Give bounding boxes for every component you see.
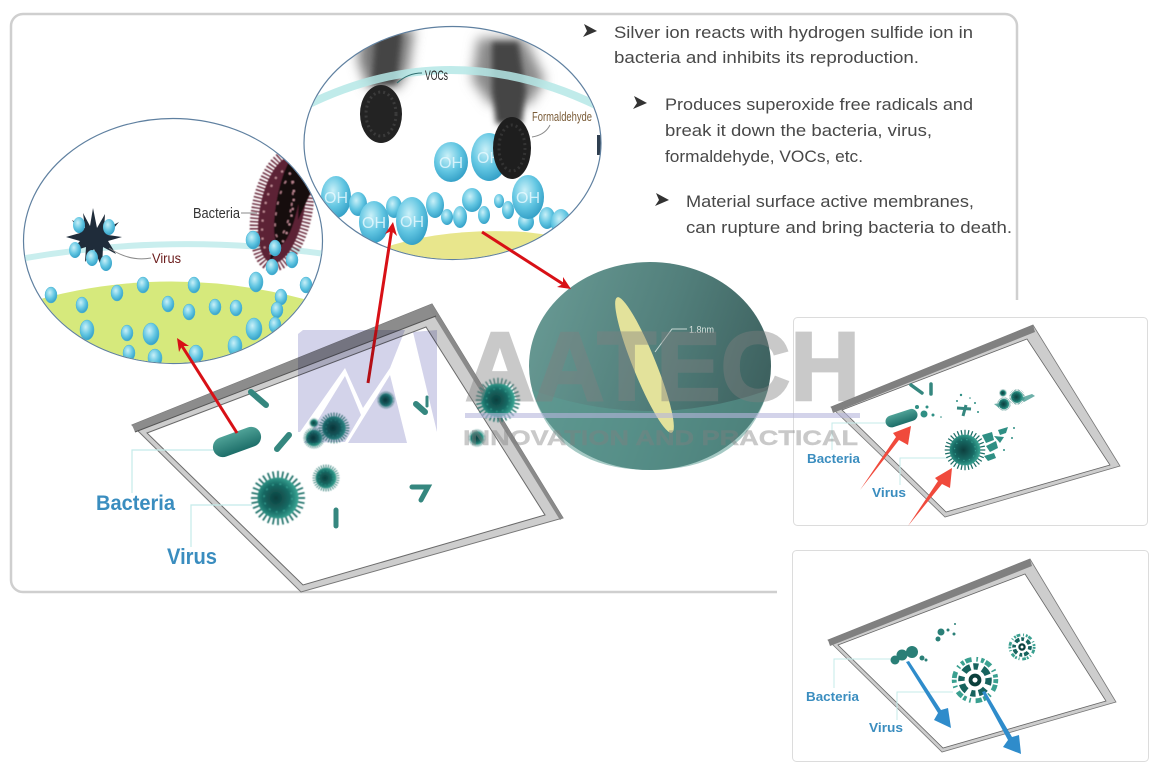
leader lines xyxy=(397,73,422,83)
bacteria breaking up xyxy=(884,384,979,429)
label: VOCs: VOCs xyxy=(425,67,448,83)
main rounded panel outline xyxy=(11,14,1017,592)
watermark: AATECH logo xyxy=(298,312,860,450)
label: Virus: Virus xyxy=(152,250,181,266)
bacterium, dark red xyxy=(248,154,314,272)
label: Virus: Virus xyxy=(872,485,906,500)
callout lines xyxy=(132,450,252,547)
label: Bacteria (large): Bacteria xyxy=(96,492,175,515)
virus debris xyxy=(954,635,1034,701)
watermark name: AATECH xyxy=(465,312,860,421)
circle: virus and bacteria on surface xyxy=(20,118,325,370)
label: Bacteria: Bacteria xyxy=(807,451,861,466)
leader line xyxy=(655,329,687,352)
bullet 2 xyxy=(633,95,973,166)
ceiling frame xyxy=(831,325,1120,517)
circle: membrane close-up xyxy=(529,262,771,470)
OH bubbles xyxy=(321,133,571,245)
smoke plumes xyxy=(358,28,545,124)
arrow to left circle xyxy=(177,338,237,433)
red arrows to close-up circles xyxy=(177,222,571,433)
red arrow: virus xyxy=(908,468,952,526)
label: Virus (large): Virus xyxy=(167,544,217,569)
virus, dark spiked xyxy=(66,208,122,271)
cyan film band xyxy=(20,244,325,259)
bullet 3: Material surface active membranes, xyxy=(686,192,974,211)
bullet 1 xyxy=(583,23,973,67)
yellow-green surface xyxy=(42,282,304,363)
leader lines xyxy=(109,213,257,259)
VOC rock xyxy=(360,85,402,143)
large ceiling panel xyxy=(132,304,563,592)
bullet 2: Produces superoxide free radicals and xyxy=(665,95,973,114)
callout lines xyxy=(832,423,948,485)
arrow to top circle xyxy=(368,222,397,383)
arrow to sphere xyxy=(482,232,571,289)
viruses xyxy=(251,378,520,525)
blue arrow: virus xyxy=(982,691,1021,754)
OH labels: OH xyxy=(324,190,348,207)
logo mark xyxy=(298,330,437,443)
ceiling frame xyxy=(828,559,1116,752)
watermark rule xyxy=(465,413,860,418)
bacteria capsule xyxy=(210,424,264,460)
watermark tagline: INNOVATION AND PRACTICAL xyxy=(463,427,858,450)
bullet 1: Silver ion reacts with hydrogen sulfide ion in xyxy=(614,23,973,42)
bottom right panel: removal stage xyxy=(792,550,1148,762)
bullet 2: formaldehyde, VOCs, etc. xyxy=(665,147,863,166)
red arrow: bacteria xyxy=(860,426,911,490)
label: Formaldehyde: Formaldehyde xyxy=(532,109,592,124)
bullet 3 xyxy=(655,192,1012,237)
OH labels: OH xyxy=(362,215,386,232)
small rods xyxy=(251,392,428,526)
label: 1.8nm: 1.8nm xyxy=(689,325,714,336)
OH labels: OH xyxy=(439,155,463,172)
label: Bacteria: Bacteria xyxy=(806,689,860,704)
bullet 1: bacteria and inhibits its reproduction. xyxy=(614,48,919,67)
virus debris xyxy=(982,394,1035,461)
OH labels: OH xyxy=(516,190,540,207)
top right panel: contact stage xyxy=(794,318,1148,526)
OH labels: OH xyxy=(400,214,424,231)
bullet text block xyxy=(583,23,1012,237)
callout lines xyxy=(834,659,953,720)
label: Virus: Virus xyxy=(869,720,903,735)
bacteria debris xyxy=(890,623,956,664)
edge mark xyxy=(597,135,600,155)
circle: VOCs and formaldehyde breakdown xyxy=(304,26,601,265)
membrane sliver xyxy=(606,293,683,437)
viruses breaking up xyxy=(945,389,1035,470)
OH labels: OH xyxy=(477,150,501,167)
blue arrow: bacteria xyxy=(906,661,951,728)
cyan film band xyxy=(305,70,598,106)
yellow surface xyxy=(386,231,544,259)
blue droplets xyxy=(45,231,312,367)
formaldehyde rock xyxy=(493,117,531,179)
label: Bacteria: Bacteria xyxy=(193,205,241,222)
bullet 3: can rupture and bring bacteria to death. xyxy=(686,218,1012,237)
OH labels xyxy=(324,150,540,232)
bullet 2: break it down the bacteria, virus, xyxy=(665,121,932,140)
